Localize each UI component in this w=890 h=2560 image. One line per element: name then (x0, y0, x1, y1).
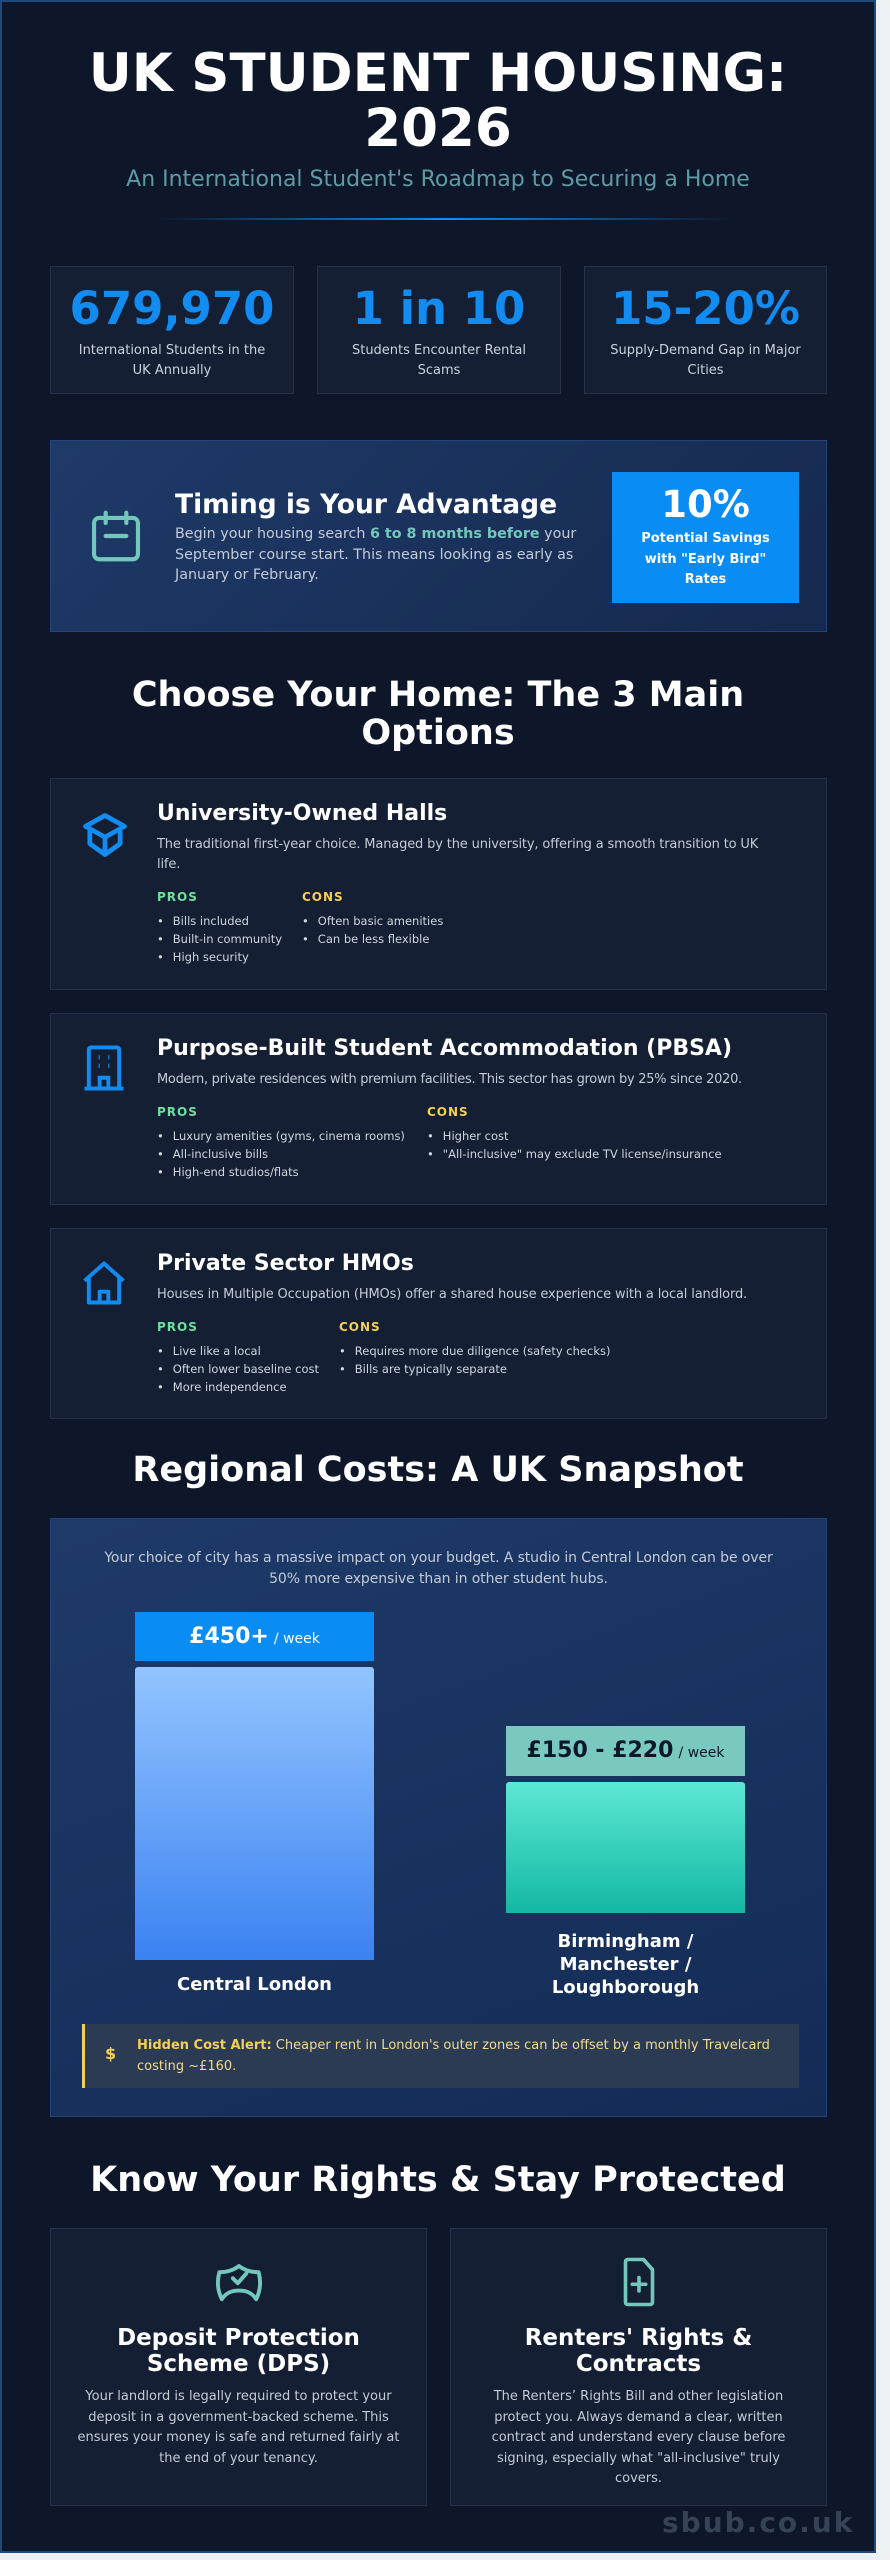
heading: regional: Regional Costs: A UK Snapshot (132, 1450, 744, 1490)
panel: university halls: University-Owned Halls (157, 801, 447, 826)
panel: PBSA: Modern, private residences with premium facilities. This sector has grown by 25% since 2020. (157, 1072, 742, 1087)
bar: Birmingham etc: Loughborough (552, 1977, 699, 1998)
panel: HMOs: Often lower baseline cost (173, 1362, 319, 1376)
icon: building (84, 1046, 124, 1090)
timing heading: Timing is Your Advantage (175, 489, 557, 520)
stat card: gap: 15-20% (611, 282, 800, 335)
panel: deposit protection: Deposit Protection (117, 2325, 360, 2351)
bar: Birmingham etc: Manchester / (560, 1954, 691, 1975)
title: UK STUDENT HOUSING: (89, 43, 787, 104)
panel: HMOs: More independence (173, 1380, 287, 1394)
bar chart (135, 1612, 745, 1998)
panel: university halls: PROS (157, 890, 198, 904)
panel: university halls: High security (173, 950, 249, 964)
panel: PBSA: "All-inclusive" may exclude TV license/insurance (443, 1147, 722, 1161)
icon: cap (83, 813, 127, 857)
panel: university halls: Bills included (173, 914, 249, 928)
panel: HMOs: Live like a local (173, 1344, 261, 1358)
stat card: scams (317, 266, 561, 394)
panel: PBSA: Luxury amenities (gyms, cinema rooms) (173, 1129, 405, 1143)
panel: deposit protection (50, 2228, 427, 2506)
heading: options: Choose Your Home: The 3 Main Options (132, 675, 744, 753)
callout: hidden cost: Hidden Cost Alert: Cheaper rent in London's outer zones can be offset by a monthly Travelcard costing ~£160. (137, 2038, 770, 2074)
panel: university halls: The traditional first-year choice. Managed by the university, offering a smooth transition to UK life. (157, 837, 758, 872)
panel: HMOs: PROS (157, 1320, 198, 1334)
stat card: students: 679,970 (70, 282, 274, 335)
stat card: students (50, 266, 294, 394)
icon: shield check (216, 2264, 262, 2302)
bar: London: £450+ / week (189, 1624, 320, 1649)
intro text: Your choice of city has a massive impact on your budget. A studio in Central London can be over 50% more expensive than in other student hubs. (104, 1550, 773, 1587)
panel: PBSA: Higher cost (443, 1129, 509, 1143)
panel: PBSA: PROS (157, 1105, 198, 1119)
icon: house (83, 1262, 125, 1304)
panel: university halls: Built-in community (173, 932, 282, 946)
timing text: Begin your housing search 6 to 8 months before your September course start. This means looking as early as January or February. (175, 526, 576, 583)
bar: London (135, 1612, 374, 1995)
subtitle: An International Student's Roadmap to Securing a Home (126, 167, 750, 192)
stat card: gap: Supply-Demand Gap in Major Cities (610, 343, 801, 378)
panel: renters rights (450, 2228, 827, 2506)
panel: regional costs (50, 1518, 827, 2117)
panel: PBSA: Purpose-Built Student Accommodation (PBSA) (157, 1036, 732, 1061)
title: 2026 (364, 98, 512, 159)
panel: HMOs (50, 1228, 827, 1419)
stat card: students: International Students in the UK Annually (79, 343, 265, 378)
icon: document plus (624, 2258, 654, 2306)
stat card: gap (584, 266, 827, 394)
panel: HMOs: Private Sector HMOs (157, 1251, 414, 1276)
panel: PBSA: All-inclusive bills (173, 1147, 268, 1161)
stat card: scams: 1 in 10 (353, 282, 525, 335)
panel: deposit protection: Your landlord is legally required to protect your deposit in a government-backed scheme. This ensures your money is safe and returned fairly at the end of your tenancy. (78, 2389, 399, 2466)
bar: London: Central London (177, 1974, 332, 1995)
stat card: scams: Students Encounter Rental Scams (352, 343, 526, 378)
panel: university halls: CONS (302, 890, 344, 904)
bar: Birmingham etc: £150 - £220 / week (527, 1738, 724, 1763)
panel: HMOs: Bills are typically separate (355, 1362, 507, 1376)
panel: PBSA: CONS (427, 1105, 469, 1119)
heading: rights: Know Your Rights & Stay Protected (90, 2160, 786, 2200)
panel: renters rights: Renters' Rights & (525, 2325, 752, 2351)
panel: university halls: Can be less flexible (318, 932, 429, 946)
panel: HMOs: CONS (339, 1320, 381, 1334)
callout: hidden cost: $ (105, 2044, 116, 2063)
callout: 10% savings (612, 472, 799, 603)
panel: university halls: Often basic amenities (318, 914, 443, 928)
bar: Birmingham etc (506, 1726, 745, 1998)
watermark: sbub.co.uk (662, 2506, 854, 2539)
panel: PBSA: High-end studios/flats (173, 1165, 299, 1179)
panel: HMOs: Houses in Multiple Occupation (HMOs) offer a shared house experience with a local landlord. (157, 1287, 747, 1302)
icon: calendar (92, 510, 140, 562)
callout: hidden cost (82, 2024, 799, 2088)
panel: university halls (50, 778, 827, 990)
panel: HMOs: Requires more due diligence (safety checks) (355, 1344, 610, 1358)
title (89, 43, 787, 159)
bar: Birmingham etc: Birmingham / (558, 1931, 693, 1952)
panel: deposit protection: Scheme (DPS) (147, 2351, 330, 2377)
callout: 10% savings: 10% (661, 483, 750, 526)
panel: timing (50, 440, 827, 632)
panel: renters rights: The Renters’ Rights Bill and other legislation protect you. Always demand a clear, written contract and understand every clause before signing, especially what "all-inclusive" truly covers. (492, 2389, 785, 2486)
panel: renters rights: Contracts (576, 2351, 701, 2377)
panel: PBSA (50, 1013, 827, 1205)
callout: 10% savings: Potential Savings with "Early Bird" Rates (641, 531, 770, 587)
